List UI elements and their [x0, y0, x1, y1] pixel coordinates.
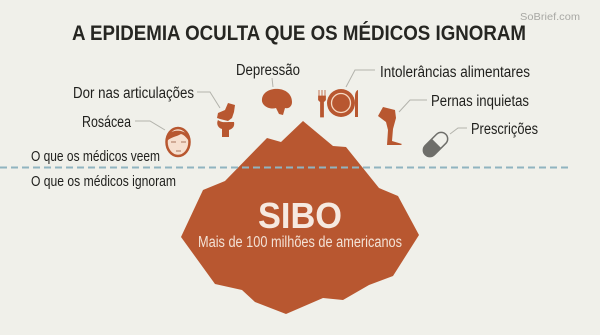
title: A EPIDEMIA OCULTA QUE OS MÉDICOS IGNORAM: [72, 20, 526, 45]
symptom: joint pain: [73, 85, 235, 137]
iceberg subheading: Mais de 100 milhões de americanos: [198, 234, 402, 251]
watermark: SoBrief.com: [520, 11, 580, 23]
symptom: prescriptions: Prescrições: [471, 121, 538, 138]
symptom: rosacea: [82, 114, 190, 156]
label: visible to doctors: O que os médicos veem: [31, 149, 160, 165]
symptom: food intolerance: Intolerâncias alimentares: [380, 64, 530, 81]
waterline divider: [0, 166, 570, 168]
symptom: restless legs: Pernas inquietas: [431, 93, 529, 110]
label: ignored by doctors: O que os médicos ignoram: [31, 174, 176, 190]
symptom: prescriptions: [421, 121, 538, 159]
symptom: joint pain: Dor nas articulações: [73, 85, 194, 102]
symptom: depression: [236, 62, 300, 115]
symptom: rosacea: Rosácea: [82, 114, 131, 131]
symptom: restless legs: [378, 93, 529, 145]
symptom: food intolerance: [318, 64, 530, 117]
iceberg: [181, 121, 419, 314]
symptom: depression: Depressão: [236, 62, 300, 79]
iceberg heading: SIBO: SIBO: [258, 195, 342, 236]
